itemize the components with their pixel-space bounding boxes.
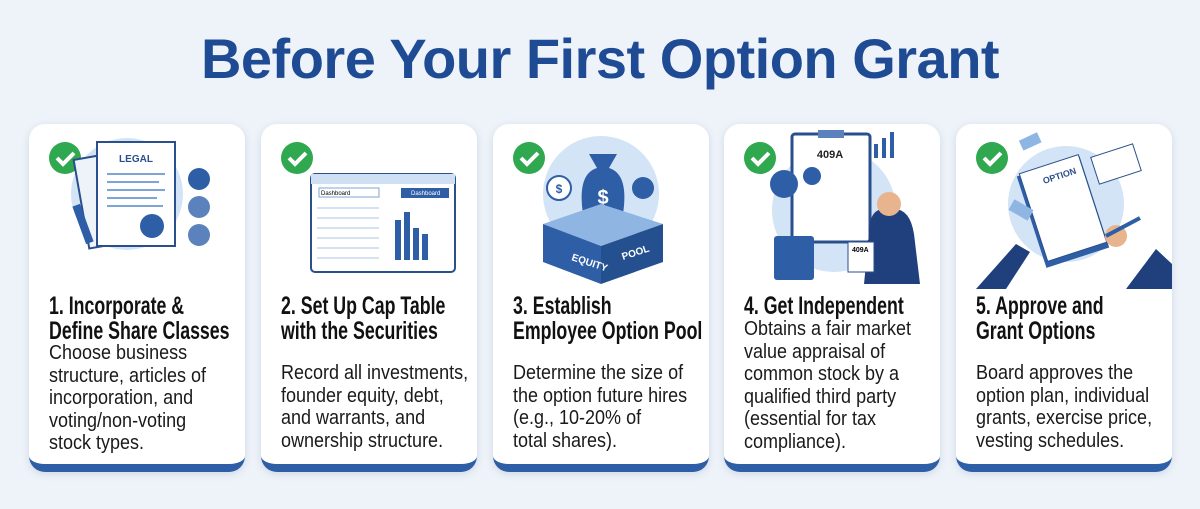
panel: step 2 [261,124,477,472]
icon: 409A appraisal [744,130,920,284]
text block: (e.g., 10-20% of [513,407,641,429]
text block: voting/non-voting [49,410,186,432]
icon: equity pool: $ [556,182,563,196]
text block: Record all investments, [281,362,468,384]
icon: equity pool: $ [597,187,609,209]
icon: equity pool: POOL [621,244,651,263]
text block [513,362,687,452]
panel: step 1 [29,124,245,472]
heading: Employee Option Pool [513,317,702,345]
text block: Obtains a fair market [744,318,911,340]
heading: 1. Incorporate & [49,292,184,320]
icon: equity pool: EQUITY [570,252,609,274]
heading [513,292,702,345]
heading: 5. Approve and [976,292,1104,320]
text block: structure, articles of [49,365,206,387]
text block: (essential for tax [744,408,876,430]
title: Before Your First Option Grant [201,27,999,90]
heading: 3. Establish [513,292,612,320]
text block: stock types. [49,432,144,454]
heading: Grant Options [976,317,1095,345]
icon: legal document: LEGAL [119,154,153,165]
text block [976,362,1152,452]
heading: Define Share Classes [49,317,230,345]
text block [49,342,206,454]
icon: legal document [49,138,210,250]
heading [49,292,230,345]
icon: cap table dashboard: Dashboard [411,191,440,197]
text block: incorporation, and [49,387,193,409]
heading: 2. Set Up Cap Table [281,292,445,320]
icon: signing option: OPTION [1042,166,1077,186]
text block: vesting schedules. [976,430,1124,452]
text block: Board approves the [976,362,1133,384]
text block: and warrants, and [281,407,425,429]
heading [976,292,1104,345]
text block: option plan, individual [976,385,1149,407]
text block: Choose business [49,342,187,364]
heading [281,292,445,345]
icon: cap table dashboard [281,142,456,273]
panel: step 4 [724,124,940,472]
icon: 409A appraisal: 409A [817,149,843,161]
text block: total shares). [513,430,617,452]
text block [281,362,468,452]
text block: grants, exercise price, [976,407,1152,429]
icon: cap table dashboard: Dashboard [321,191,350,197]
icon: equity pool [513,136,663,284]
text block: value appraisal of [744,341,885,363]
text block: founder equity, debt, [281,385,444,407]
icon: 409A appraisal: 409A [852,247,869,254]
text block: qualified third party [744,386,896,408]
heading: 4. Get Independent [744,292,904,320]
panel: step 5 [956,124,1172,472]
text block: Determine the size of [513,362,683,384]
icon: signing option [976,132,1172,289]
text block: ownership structure. [281,430,443,452]
heading: with the Securities [281,317,438,345]
text block: the option future hires [513,385,687,407]
text block [744,318,911,453]
panel: step 3 [493,124,709,472]
text block: common stock by a [744,363,899,385]
text block: compliance). [744,431,846,453]
